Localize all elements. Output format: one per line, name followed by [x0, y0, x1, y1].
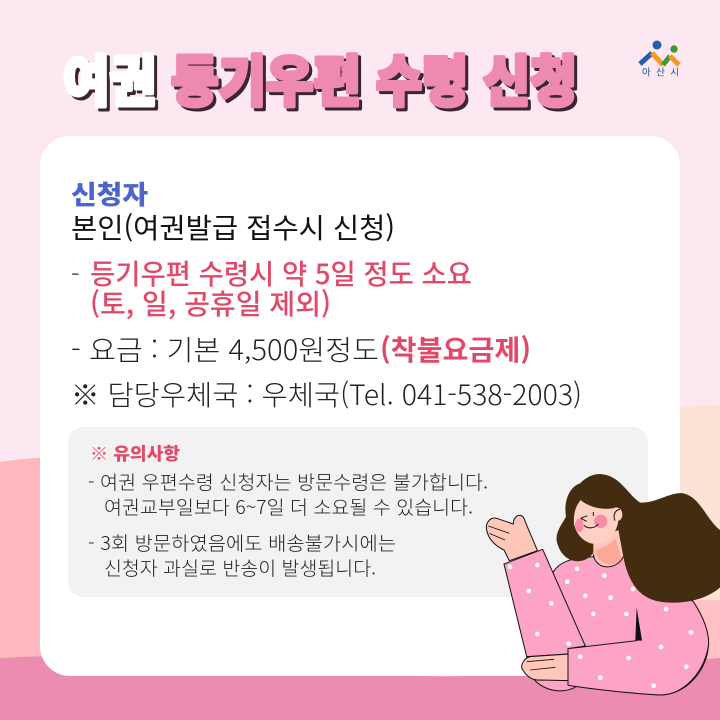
armpit fold: [635, 607, 642, 641]
body sweater: [527, 557, 709, 695]
title: [63, 37, 580, 120]
title: pink words: [171, 37, 577, 117]
notes: item two: - 3회 방문하였음에도 배송불가시에는: [88, 529, 396, 556]
text: delivery time: (토, 일, 공휴일 제외): [90, 283, 331, 323]
title shadow: 등기우편: [174, 40, 364, 120]
notes heading: ※ 유의사항: [90, 441, 180, 466]
heading: applicant: 신청자: [71, 175, 148, 212]
text: post office contact: ※ 담당우체국 : 우체국(Tel. 041-538-2003): [71, 374, 582, 414]
notes: item one: [88, 468, 488, 520]
hair: [557, 474, 720, 603]
text: delivery time: [71, 253, 472, 323]
background: bottom band: [0, 656, 720, 720]
title shadow: 여권: [66, 40, 159, 120]
text: delivery time: -: [71, 255, 80, 292]
text: fee: (착불요금제): [380, 329, 531, 369]
panel: notes: [68, 427, 648, 597]
title shadow: [66, 40, 580, 120]
icon: city logo: [640, 40, 679, 78]
eyes and mouth: [581, 509, 620, 528]
title shadow: 수령: [379, 40, 471, 120]
text: delivery time: 등기우편 수령시 약 5일 정도 소요: [90, 253, 472, 293]
notes: item two: [88, 529, 396, 581]
icon: city logo: 아산시: [642, 64, 679, 78]
title: white word: 여권: [63, 37, 156, 117]
background: right peach panel: [660, 405, 720, 670]
neck: [593, 530, 623, 567]
background: left pink hill: [0, 456, 130, 670]
hand raised: [486, 515, 537, 561]
sweater dots: [508, 563, 693, 688]
lower arm sleeve: [568, 637, 707, 695]
text: fee: - 요금 : 기본 4,500원정도: [71, 329, 379, 369]
illustration: woman pointing: [486, 474, 720, 695]
cheeks: [594, 515, 607, 528]
background: right lower pink: [660, 600, 720, 670]
panel: white card: [40, 136, 680, 676]
title: pink words: 등기우편: [171, 37, 361, 117]
face: [574, 500, 622, 544]
text: fee: [71, 329, 531, 369]
title shadow: 신청: [486, 40, 580, 120]
text: applicant detail: 본인(여권발급 접수시 신청): [71, 207, 395, 247]
title: pink words: 신청: [483, 37, 577, 117]
raised arm sleeve: [504, 549, 585, 657]
title: pink words: 수령: [376, 37, 468, 117]
hand lower: [522, 654, 569, 681]
notes: item two: 신청자 과실로 반송이 발생됩니다.: [104, 554, 376, 581]
notes: item one: - 여권 우편수령 신청자는 방문수령은 불가합니다.: [88, 468, 488, 495]
notes: item one: 여권교부일보다 6~7일 더 소요될 수 있습니다.: [104, 493, 473, 520]
